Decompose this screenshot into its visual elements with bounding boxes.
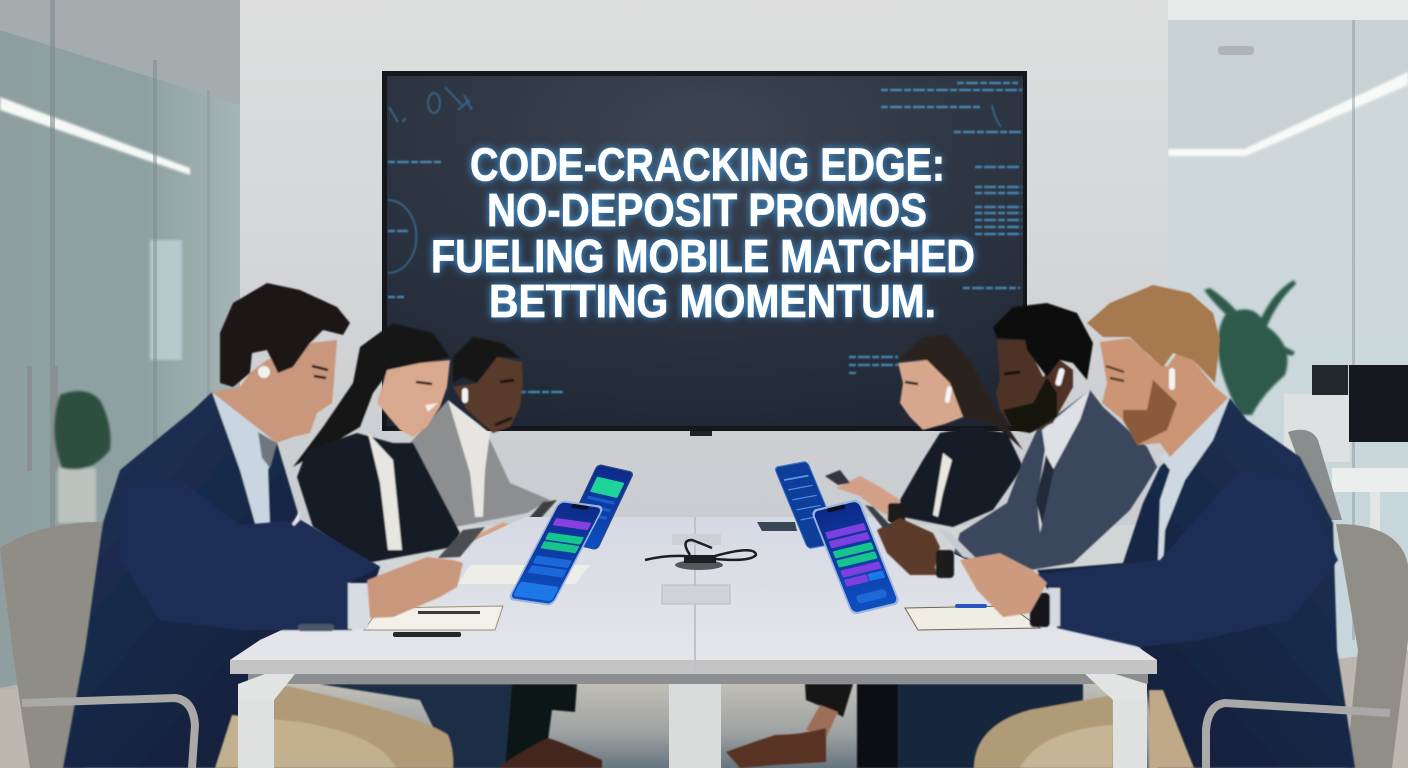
held phones	[865, 505, 892, 528]
left glass partition	[0, 0, 240, 700]
tan trousers right	[974, 695, 1113, 768]
chair arm left	[22, 698, 195, 768]
right computer desk	[1284, 365, 1408, 532]
wall	[240, 0, 1168, 525]
conference table	[230, 517, 1157, 768]
headline text on screen: CODE-CRACKING EDGE:	[470, 140, 945, 191]
centre floor reflection	[270, 680, 1150, 768]
eye	[905, 382, 918, 384]
arms and hands, right side	[865, 470, 1338, 647]
chair left	[0, 522, 102, 768]
blazer	[900, 427, 1023, 527]
shirt	[368, 433, 402, 550]
person: man front right body	[1037, 285, 1355, 768]
headline text on screen: FUELING MOBILE MATCHED	[431, 231, 975, 282]
hair	[293, 323, 450, 467]
person: man front left body	[63, 283, 380, 768]
cable puck	[645, 540, 756, 570]
front-left sleeve	[120, 480, 380, 630]
left plant	[54, 391, 111, 523]
table ports	[672, 534, 721, 545]
front-right hand	[960, 553, 1047, 617]
legs under table	[215, 684, 1194, 768]
neck and face	[1100, 338, 1228, 457]
jeans right	[898, 684, 1083, 768]
wall TV screen	[382, 71, 1027, 436]
hand	[467, 522, 527, 568]
hair	[453, 337, 520, 383]
hair	[220, 283, 350, 387]
blazer	[297, 433, 460, 563]
pocket square	[292, 510, 300, 526]
beard	[1003, 377, 1057, 433]
neck and face	[212, 340, 337, 443]
shirt	[212, 392, 277, 587]
floor	[0, 650, 1408, 768]
person: man right in grey-blue suit	[952, 303, 1157, 583]
phone: front left	[507, 500, 605, 606]
person: man in grey blazer	[407, 337, 550, 528]
hair	[993, 303, 1093, 380]
shirt	[448, 400, 490, 517]
right plant	[1204, 280, 1296, 415]
chair arm right	[1206, 703, 1390, 768]
shirt	[1037, 390, 1090, 533]
shirt	[1158, 397, 1230, 585]
shoes left	[498, 738, 602, 768]
eye and beard shadow	[495, 380, 514, 425]
eye	[1004, 372, 1020, 374]
headline text on screen: NO-DEPOSIT PROMOS	[487, 185, 927, 236]
face	[453, 357, 523, 433]
eye	[416, 382, 432, 384]
faint screen data decorations	[388, 83, 1022, 392]
hair	[1087, 285, 1220, 383]
person: woman right	[825, 335, 1023, 527]
arm and hand	[836, 476, 900, 517]
black trousers left	[505, 684, 577, 768]
headline text on screen	[431, 140, 975, 327]
tan trousers left	[215, 684, 453, 768]
arms and hands, left side	[120, 480, 485, 631]
hair	[898, 335, 1023, 450]
chair right	[1336, 524, 1408, 768]
dress right	[805, 684, 853, 717]
person: woman left	[293, 323, 557, 568]
front-right sleeve	[1037, 470, 1338, 647]
headline text on screen: BETTING MOMENTUM.	[489, 276, 936, 327]
face	[996, 340, 1073, 433]
notebooks and pens	[364, 606, 503, 630]
held phone	[438, 527, 485, 558]
dark-suit man's hand and watch	[877, 518, 940, 575]
face	[377, 360, 450, 437]
phone: back left	[560, 464, 635, 550]
front-left hand	[367, 557, 463, 618]
jeans left	[319, 684, 528, 768]
phone: front right	[810, 499, 901, 615]
eye and brow	[312, 366, 328, 378]
eye and brow	[1106, 366, 1124, 381]
face	[898, 360, 963, 430]
collar shade	[258, 432, 277, 468]
black trousers right	[857, 684, 907, 768]
right office	[1168, 0, 1408, 768]
beard	[1123, 380, 1177, 445]
grey blazer	[407, 400, 550, 528]
sleeve buttons	[298, 624, 334, 631]
phone: back right	[774, 461, 841, 549]
shirt	[933, 453, 952, 517]
